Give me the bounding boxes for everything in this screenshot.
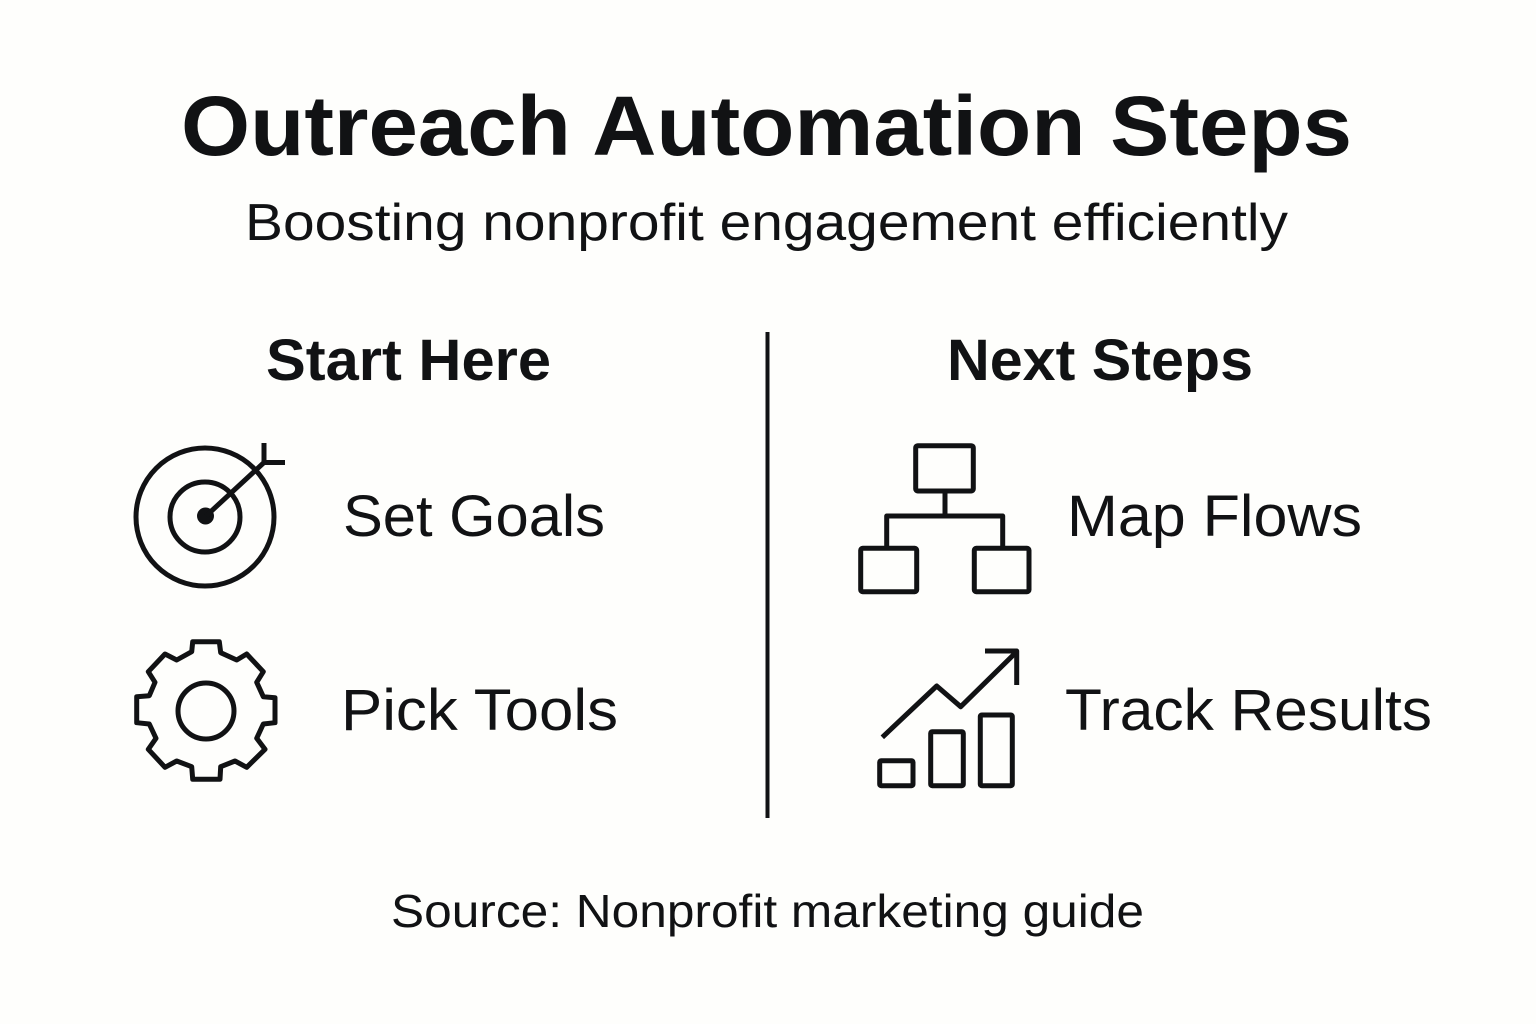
label: set goals: Set Goals	[343, 484, 605, 549]
icon: target with arrow	[136, 443, 285, 586]
heading: next steps: Next Steps	[947, 328, 1253, 393]
label: track results: Track Results	[1065, 678, 1432, 743]
icon: gear	[137, 642, 275, 779]
label: pick tools: Pick Tools	[341, 678, 618, 743]
divider	[766, 332, 770, 818]
heading: start here: Start Here	[266, 328, 551, 393]
icon: growth chart with arrow	[880, 651, 1017, 786]
label: map flows: Map Flows	[1067, 484, 1362, 549]
title: Outreach Automation Steps	[181, 79, 1352, 173]
panel: next steps	[861, 328, 1432, 786]
panel: start here	[136, 328, 618, 779]
icon: flow chart	[861, 446, 1029, 592]
source note: Source: Nonprofit marketing guide	[391, 885, 1144, 937]
subtitle: Boosting nonprofit engagement efficiently	[245, 194, 1288, 252]
